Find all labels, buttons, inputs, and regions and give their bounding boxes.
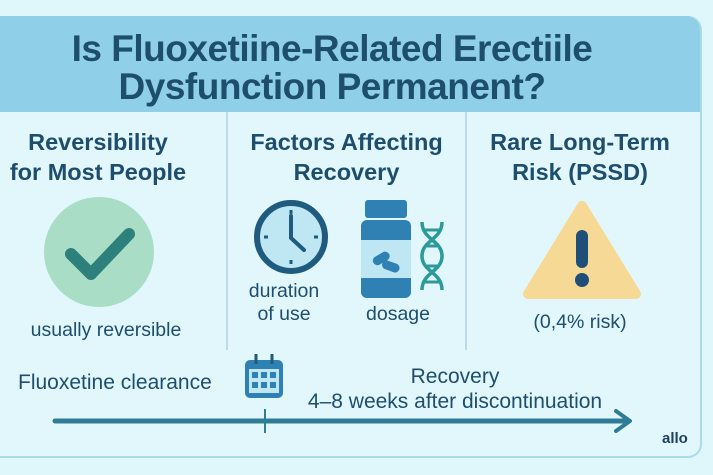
icon: check circle <box>44 197 154 307</box>
timeline <box>18 354 632 434</box>
dividers <box>226 112 228 350</box>
heading: Rare Long-Term <box>490 129 670 155</box>
logo: allo <box>662 430 688 447</box>
heading: Recovery <box>294 159 399 185</box>
heading: Factors Affecting <box>250 129 443 155</box>
icon: bottle <box>361 200 411 298</box>
label: clearance: Fluoxetine clearance <box>18 371 212 394</box>
heading <box>10 129 186 185</box>
text: duration <box>249 280 319 325</box>
icon: calendar <box>245 354 283 398</box>
heading: Reversibility <box>28 129 168 155</box>
heading <box>250 129 443 185</box>
heading: Risk (PSSD) <box>512 159 648 185</box>
title: Dysfunction Permanent? <box>119 66 545 107</box>
label: recovery: 4–8 weeks after discontinuation <box>308 390 602 413</box>
label: recovery <box>308 365 602 413</box>
icon: dna <box>420 222 444 290</box>
panel: reversibility <box>10 129 186 341</box>
text: duration: duration <box>249 280 319 302</box>
text: duration: of use <box>257 303 311 325</box>
panel: factors <box>249 129 444 325</box>
title: Is Fluoxetiine-Related Erectiile <box>72 28 592 69</box>
title <box>72 28 592 107</box>
text: dosage: dosage <box>366 303 430 325</box>
text: usually reversible <box>31 319 181 341</box>
text: (0,4% risk) <box>533 311 627 333</box>
icon: warning <box>523 201 641 299</box>
header band <box>0 16 700 112</box>
arrow <box>52 408 632 434</box>
heading: for Most People <box>10 159 186 185</box>
heading <box>490 129 670 185</box>
label: recovery: Recovery <box>411 365 499 388</box>
icon: clock <box>254 200 328 274</box>
panel: PSSD <box>490 129 670 333</box>
